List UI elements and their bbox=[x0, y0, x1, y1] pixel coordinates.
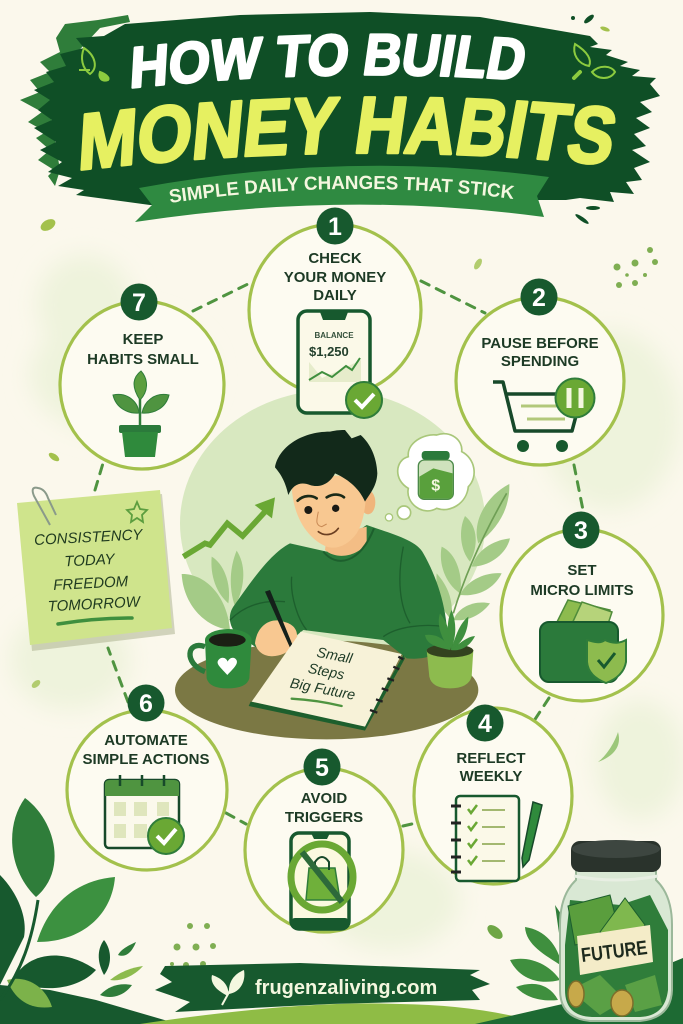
step 4 badge: 4 bbox=[478, 710, 492, 738]
step 5 label: AVOID bbox=[301, 790, 347, 807]
step 4 badge bbox=[466, 704, 504, 742]
step 2 badge bbox=[520, 278, 558, 316]
icon: blocked shopping phone bbox=[291, 833, 353, 929]
thought bubble with jar bbox=[385, 434, 474, 521]
icon: calendar with check bbox=[105, 775, 184, 854]
note text: FREEDOM bbox=[53, 573, 129, 594]
step 7 label: HABITS SMALL bbox=[87, 351, 199, 368]
notebook text: Small bbox=[315, 645, 354, 668]
step 3 bbox=[501, 512, 663, 701]
step 2 bbox=[456, 278, 624, 465]
icon: phone balance: $1,250 bbox=[309, 344, 349, 359]
notebook bbox=[249, 632, 405, 731]
mug bbox=[190, 629, 252, 688]
step 6 label: SIMPLE ACTIONS bbox=[83, 751, 209, 768]
ribbon subtitle bbox=[135, 166, 549, 222]
foreground plants left bbox=[0, 798, 178, 1024]
step 3 badge: 3 bbox=[574, 517, 588, 545]
step 6 label: AUTOMATE bbox=[104, 732, 188, 749]
head bbox=[275, 430, 377, 561]
icon: leaf logo bbox=[212, 970, 244, 1005]
potted plant bbox=[425, 610, 475, 688]
icon: phone balance: BALANCE bbox=[314, 331, 354, 340]
step 2 label: PAUSE BEFORE bbox=[481, 335, 599, 352]
step 1 badge: 1 bbox=[328, 213, 342, 241]
background leaves right bbox=[436, 484, 510, 620]
sweater bbox=[230, 525, 447, 659]
ribbon subtitle: SIMPLE DAILY CHANGES THAT STICK bbox=[170, 176, 514, 202]
step 6 badge: 6 bbox=[139, 690, 153, 718]
notebook: Steps bbox=[307, 661, 346, 684]
step 7 label: KEEP bbox=[123, 331, 163, 348]
icon: potted plant bbox=[113, 371, 169, 457]
central illustration: person writing bbox=[175, 390, 510, 739]
decorative sparks bbox=[571, 13, 610, 225]
step 1 badge bbox=[316, 208, 354, 244]
header banner bbox=[20, 12, 660, 224]
plants behind jar bbox=[510, 905, 565, 1000]
icon: cart with pause bbox=[493, 378, 594, 452]
note text: CONSISTENCY bbox=[34, 526, 144, 549]
hand with pen bbox=[255, 590, 297, 657]
decorative dots and small leaves bbox=[30, 217, 658, 968]
background leaves left bbox=[182, 551, 243, 630]
step 3 label: MICRO LIMITS bbox=[530, 582, 634, 599]
money inside bbox=[565, 895, 668, 1017]
future jar bbox=[560, 840, 672, 1021]
hair bbox=[275, 430, 377, 502]
heading: money habits: MONEY HABITS bbox=[80, 96, 616, 171]
heading: money habits bbox=[80, 96, 616, 171]
step 3 label: SET bbox=[567, 562, 597, 579]
icon: wallet with shield bbox=[540, 600, 626, 683]
notebook: Big Future bbox=[289, 676, 357, 704]
label: FUTURE bbox=[580, 936, 648, 966]
step 5 bbox=[245, 748, 403, 932]
step 2 badge: 2 bbox=[532, 284, 546, 312]
step 5 badge bbox=[304, 748, 340, 786]
background circle bbox=[180, 390, 485, 657]
heading: how to build: HOW TO BUILD bbox=[131, 33, 525, 89]
note text: TODAY bbox=[64, 551, 116, 570]
table bbox=[175, 641, 478, 739]
icon: right leaves bbox=[574, 44, 615, 78]
step 5 badge: 5 bbox=[315, 754, 329, 782]
face bbox=[298, 495, 344, 535]
paperclip bbox=[33, 488, 56, 525]
sticky note bbox=[17, 488, 175, 651]
thought bubble with jar: $ bbox=[431, 478, 440, 495]
step 3 badge bbox=[562, 512, 600, 548]
coins bbox=[568, 981, 633, 1016]
step 7 bbox=[60, 284, 224, 469]
step 4 label: WEEKLY bbox=[460, 768, 522, 785]
step 7 badge bbox=[120, 284, 158, 320]
jar lid bbox=[571, 840, 661, 880]
footer hill bbox=[140, 958, 683, 1024]
note text: TOMORROW bbox=[47, 593, 142, 615]
star bbox=[127, 502, 147, 522]
step 2 label: SPENDING bbox=[501, 353, 579, 370]
connectors dashed path bbox=[95, 281, 583, 826]
step 4 bbox=[414, 704, 572, 884]
label bbox=[577, 925, 653, 975]
icon: checklist and pen bbox=[451, 796, 542, 881]
step 7 badge: 7 bbox=[132, 289, 146, 317]
step 5 label: TRIGGERS bbox=[285, 809, 363, 826]
step 1 label: YOUR MONEY bbox=[284, 269, 386, 286]
step 1 bbox=[249, 208, 421, 418]
step 6 bbox=[67, 684, 227, 870]
step 6 badge bbox=[128, 684, 164, 722]
rising arrow bbox=[183, 497, 275, 557]
step 4 label: REFLECT bbox=[456, 750, 526, 767]
note text bbox=[34, 526, 147, 616]
site name: frugenzaliving.com bbox=[255, 977, 437, 999]
step 1 label: CHECK bbox=[308, 250, 362, 267]
icon: left leaves bbox=[79, 48, 109, 81]
footer brush with site bbox=[155, 963, 490, 1012]
brush background bbox=[20, 12, 660, 205]
step 1 label: DAILY bbox=[313, 287, 357, 304]
icon: phone balance bbox=[298, 311, 382, 418]
